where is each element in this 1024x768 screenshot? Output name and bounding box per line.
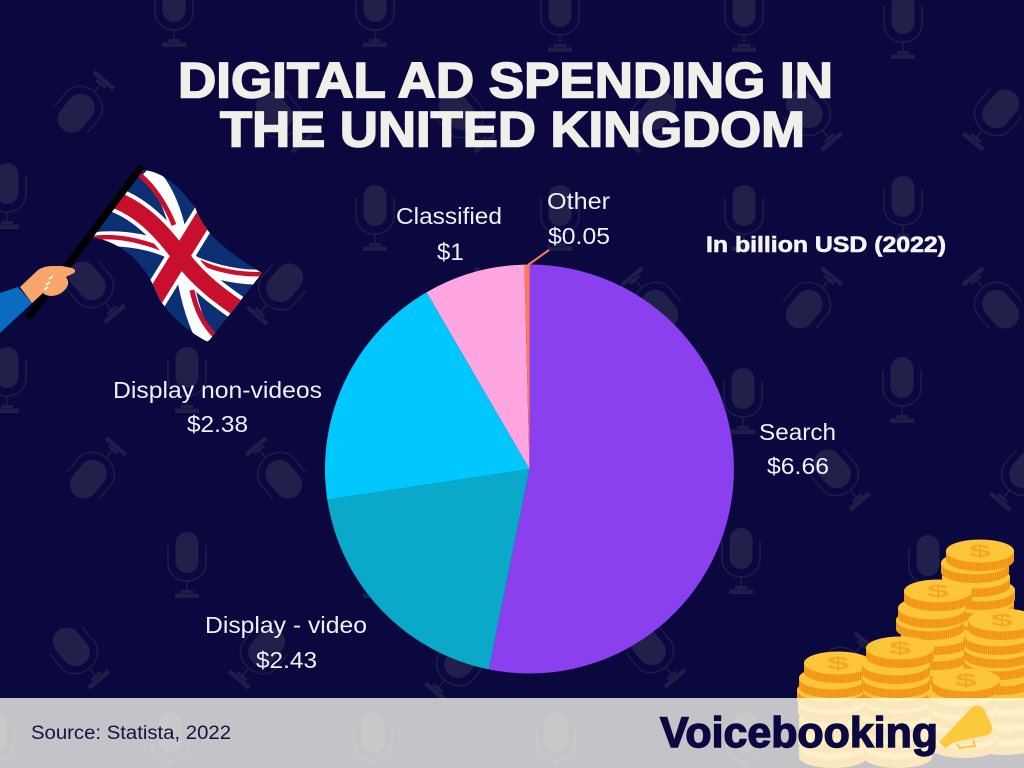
label: Search (759, 419, 836, 479)
pie chart (325, 250, 734, 673)
sleeve (0, 287, 32, 333)
label: Other: Other (547, 188, 610, 214)
label: Other (547, 188, 610, 249)
label: Classified: $1 (437, 239, 464, 266)
title: DIGITAL AD SPENDING IN (178, 52, 833, 108)
slice: Display - video (327, 469, 530, 669)
slice: Display non-videos (325, 292, 530, 500)
title: THE UNITED KINGDOM (220, 102, 805, 158)
label: Search: $6.66 (767, 453, 829, 479)
coin stack: front (928, 668, 1000, 758)
icon: stacks of gold coins (797, 540, 1024, 768)
icon: UK flag held by hand (0, 160, 270, 350)
slice: Other (524, 264, 530, 469)
coin dollar signs: $ (991, 610, 1013, 630)
coin stack: middle left (862, 636, 934, 768)
logo wordmark: Voicebooking (660, 709, 938, 757)
label: Other: $0.05 (548, 223, 610, 249)
coin dollar signs: $ (927, 581, 949, 601)
label: Display non-videos: Display non-videos (113, 377, 322, 403)
label: Display - video: Display - video (205, 612, 367, 638)
label: Search: Search (759, 419, 836, 445)
title (178, 52, 833, 158)
source note: Source: Statista, 2022 (31, 723, 231, 744)
slice: Search (489, 264, 734, 673)
coin stack: right (964, 608, 1024, 755)
icon: megaphone (939, 706, 992, 748)
logo: Voicebooking (660, 706, 992, 757)
label: Classified: Classified (396, 203, 502, 229)
label: Display non-videos (113, 377, 322, 437)
leader line: Other (528, 250, 549, 265)
coin dollar signs: $ (827, 653, 849, 673)
unit note: In billion USD (2022) (706, 232, 946, 257)
coin dollar signs: $ (889, 638, 911, 658)
label: Display - video (205, 612, 367, 673)
flag (93, 170, 262, 342)
footer band (0, 698, 1024, 768)
coin dollar signs (827, 541, 1013, 690)
flag pole (28, 166, 142, 318)
label: Display non-videos: $2.38 (187, 411, 248, 437)
coin stack: centre (896, 580, 972, 730)
label: Classified (396, 203, 502, 266)
coin dollar signs: $ (955, 670, 977, 690)
coin stack: back right (941, 540, 1015, 636)
slice: Classified (427, 265, 530, 469)
hand (20, 266, 75, 303)
label: Display - video: $2.43 (256, 647, 317, 673)
coin dollar signs: $ (969, 541, 991, 561)
coin stack: far left (797, 652, 872, 768)
pie labels (113, 188, 836, 673)
